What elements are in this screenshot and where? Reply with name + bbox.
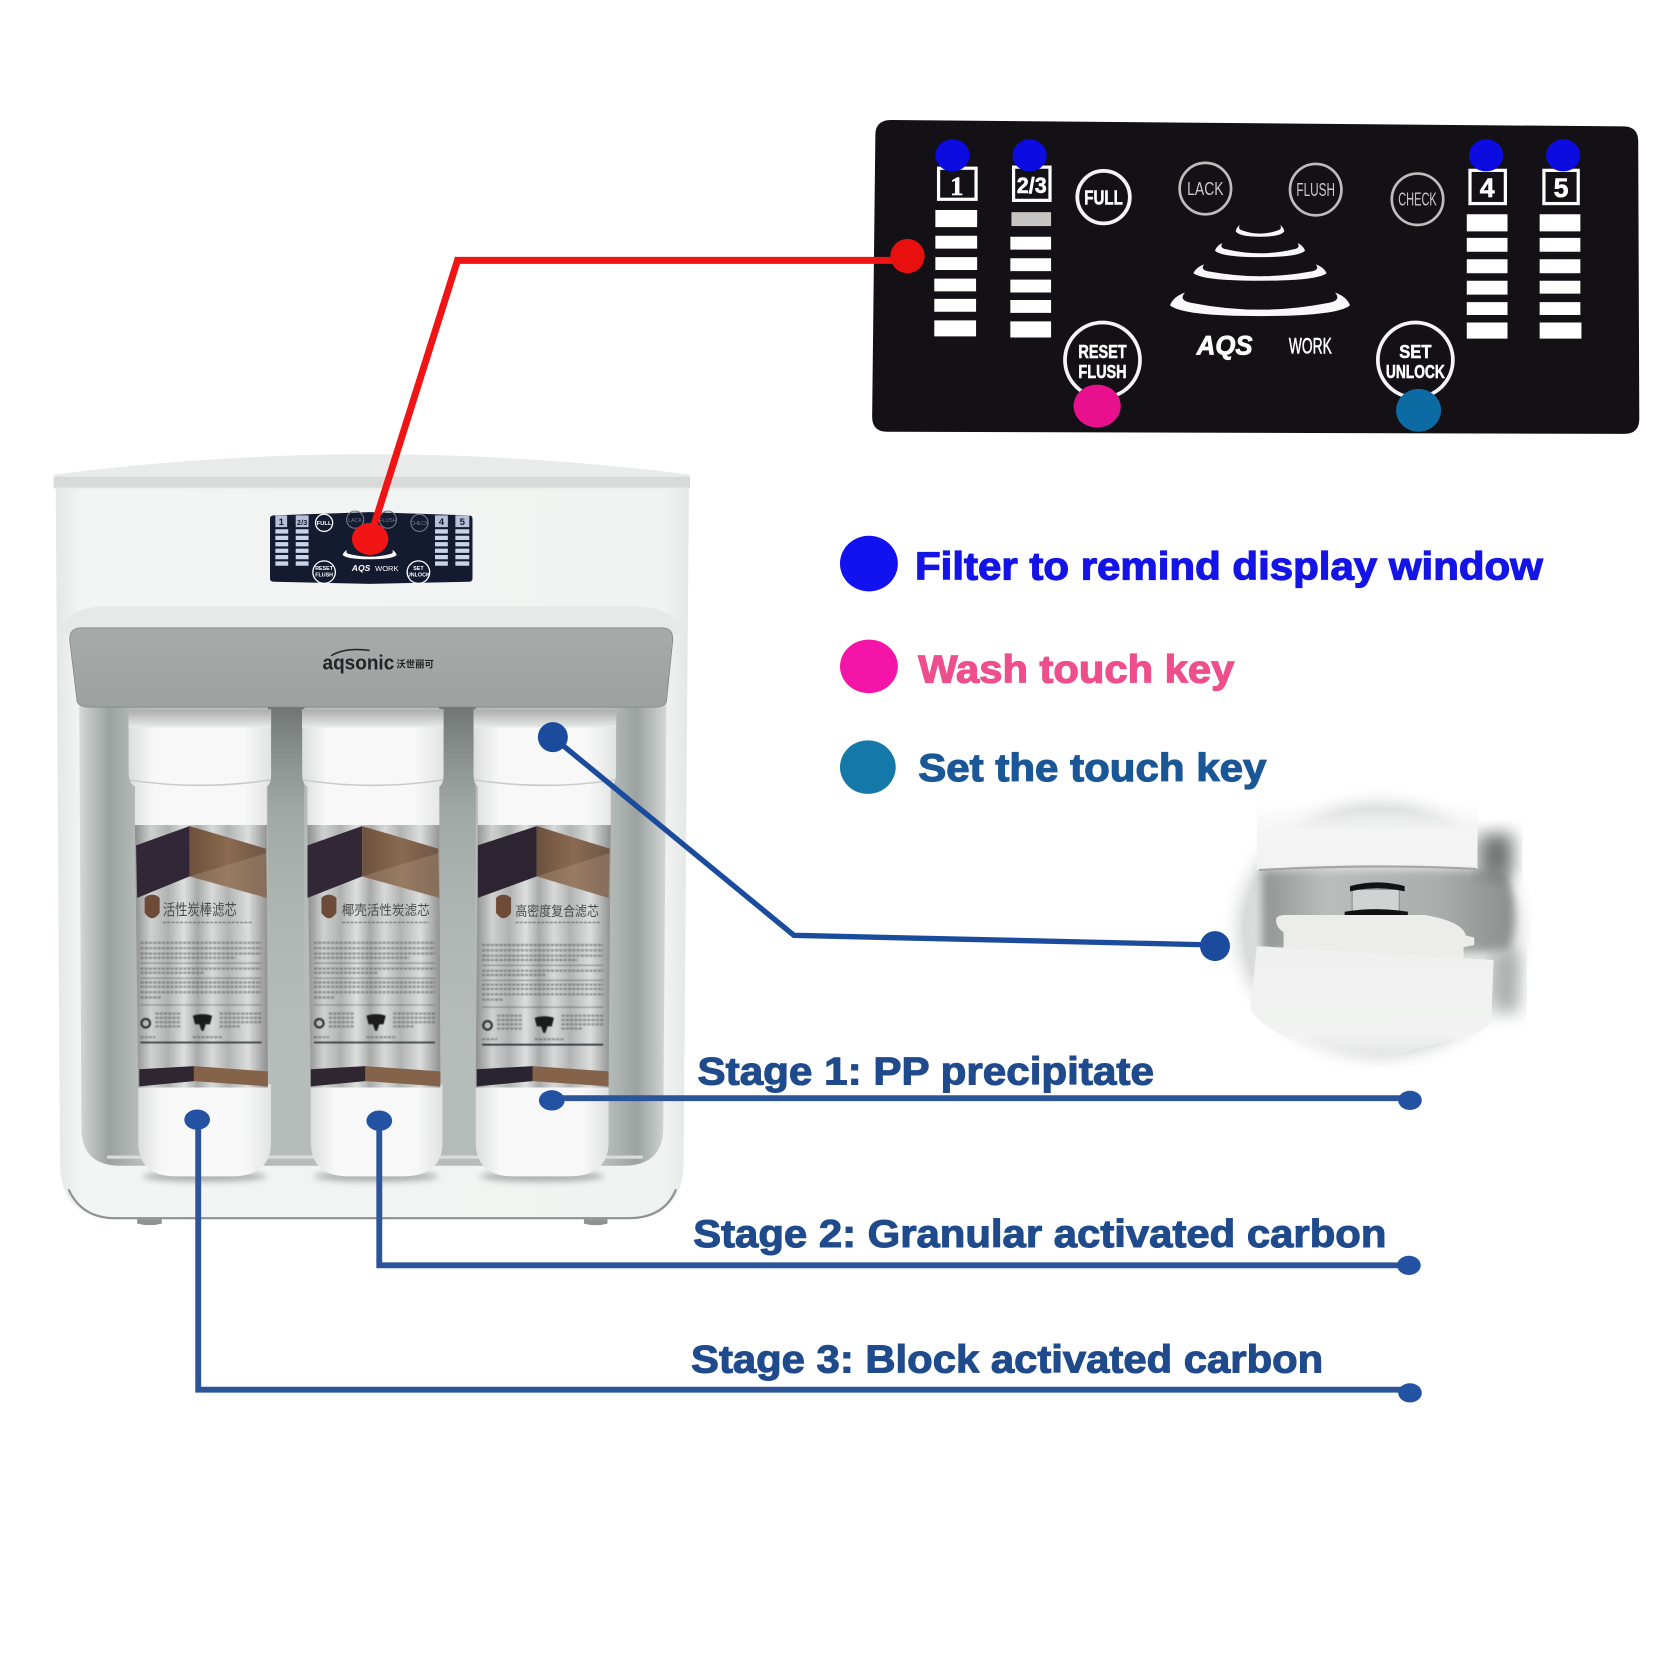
small control panel on purifier: 1 — [279, 517, 285, 528]
CHECK indicator: CHECK — [1398, 190, 1437, 210]
FLUSH indicator: FLUSH — [1296, 180, 1335, 200]
teal marker: set key — [1396, 389, 1441, 432]
interior recess — [79, 702, 666, 1166]
callout: stage 2 — [366, 1111, 1421, 1275]
legend: wash touch key: Wash touch key — [918, 648, 1235, 691]
blue markers: filter display windows — [935, 139, 1580, 171]
brand logo: aqsonic — [322, 653, 394, 675]
filter cartridge 2 — [302, 709, 444, 1176]
indicator column 1 — [934, 168, 977, 336]
small control panel on purifier: SET — [413, 566, 424, 572]
legend: filter display window — [840, 536, 1544, 591]
legend: set the touch key: Set the touch key — [918, 747, 1267, 790]
small control panel on purifier: LACK — [348, 518, 363, 524]
cartridge shadows — [142, 1171, 604, 1182]
black o-rings — [1345, 882, 1408, 918]
feet — [137, 1219, 608, 1225]
legend: filter display window: Filter to remind display window — [915, 546, 1544, 589]
lower cup — [1250, 946, 1494, 1055]
CHECK indicator — [1392, 174, 1443, 225]
callout: stage 1 — [539, 1050, 1422, 1111]
small control panel on purifier: 2/3 — [297, 518, 307, 527]
callout: stage 2: Stage 2: Granular activated carbon — [693, 1213, 1386, 1256]
inner cup — [1276, 915, 1474, 960]
small control panel on purifier: CHECK — [410, 521, 429, 527]
filter cartridge 1 — [129, 709, 271, 1176]
brand logo — [322, 649, 434, 675]
purifier body — [56, 484, 689, 1219]
stem — [1352, 889, 1399, 913]
indicator column 5 — [1540, 170, 1581, 339]
pink marker: wash key — [1074, 385, 1121, 428]
small control panel on purifier: 4 — [439, 517, 445, 528]
SET UNLOCK button: UNLOCK — [1386, 362, 1445, 382]
RESET FLUSH button: FLUSH — [1078, 362, 1127, 382]
LACK indicator — [1180, 163, 1231, 214]
callout: stage 1: Stage 1: PP precipitate — [698, 1050, 1154, 1093]
AQS logo: AQS — [1196, 331, 1253, 361]
filter cartridge 1: 活性炭棒滤芯 — [163, 901, 237, 919]
indicator column 4 — [1467, 170, 1508, 339]
small control panel on purifier: FLUSH — [379, 518, 397, 524]
FULL button: FULL — [1084, 188, 1123, 210]
small control panel on purifier: UNLOCK — [407, 572, 430, 578]
product: water purifier — [54, 454, 690, 1225]
filter cartridge 3: 高密度复合滤芯 — [515, 903, 599, 919]
legend: set the touch key — [840, 740, 1267, 794]
transparent lid — [54, 454, 690, 489]
indicator column 2/3 — [1010, 167, 1051, 338]
RESET FLUSH button — [1065, 322, 1140, 398]
water level arcs — [1170, 225, 1350, 316]
dark corner right — [1481, 834, 1513, 876]
callout line: display panel (red) — [352, 239, 925, 555]
SET UNLOCK button: SET — [1399, 342, 1431, 362]
indicator column 2/3: 2/3 — [1017, 173, 1047, 198]
grey brand band — [70, 628, 673, 707]
WORK label: WORK — [1289, 334, 1332, 359]
inset disc — [1218, 785, 1540, 1075]
LACK indicator: LACK — [1187, 179, 1224, 199]
indicator column 4: 4 — [1480, 173, 1495, 203]
shoulder — [61, 606, 683, 634]
FLUSH indicator — [1290, 164, 1341, 215]
FULL button — [1077, 171, 1130, 223]
panel background — [872, 120, 1639, 434]
callout line: filter connector — [538, 722, 1230, 961]
small control panel on purifier: RESET — [315, 566, 334, 572]
small control panel on purifier: FLUSH — [315, 572, 333, 578]
body base edge — [69, 1189, 676, 1218]
indicator column 1: 1 — [950, 171, 963, 201]
legend: wash touch key — [840, 640, 1235, 693]
SET UNLOCK button — [1378, 322, 1453, 398]
small control panel on purifier: AQS — [351, 563, 371, 573]
filter cartridge 3 — [474, 709, 616, 1176]
filter cartridge 2: 椰壳活性炭滤芯 — [342, 902, 430, 918]
callout: stage 3: Stage 3: Block activated carbon — [691, 1339, 1323, 1382]
small control panel on purifier — [270, 511, 472, 584]
magnified touch panel — [872, 120, 1639, 434]
grey cavity — [1262, 870, 1514, 951]
callout: stage 3 — [184, 1109, 1422, 1402]
upper cap — [1257, 801, 1478, 870]
small control panel on purifier: WORK — [375, 564, 398, 573]
RESET FLUSH button: RESET — [1078, 342, 1127, 362]
interior bottom lip — [107, 1156, 643, 1159]
small control panel on purifier: FULL — [317, 521, 332, 527]
column dividers — [268, 702, 476, 1071]
indicator column 5: 5 — [1554, 173, 1569, 203]
right lower shade — [1494, 951, 1519, 1012]
inset photo: filter connector close-up — [1218, 785, 1540, 1075]
brand logo: 沃世丽可 — [396, 658, 434, 670]
small control panel on purifier: 5 — [460, 517, 466, 528]
lid rim — [54, 477, 690, 487]
